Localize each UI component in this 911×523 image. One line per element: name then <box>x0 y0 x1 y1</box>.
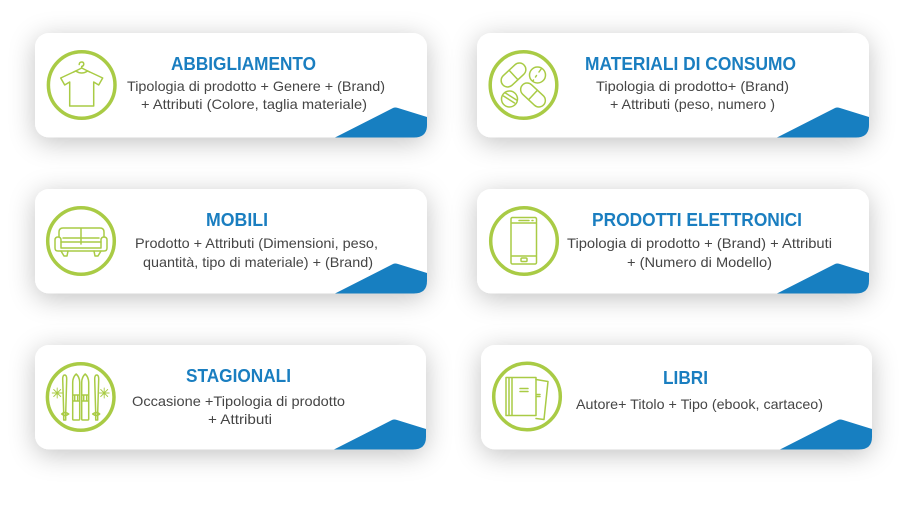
corner accent: libri <box>780 420 872 450</box>
heading: mobili: MOBILI <box>206 209 268 230</box>
heading: prodotti elettronici: PRODOTTI ELETTRONICI <box>592 209 802 230</box>
icon: pills <box>490 52 557 118</box>
corner accent: abbigliamento <box>335 108 427 138</box>
text: mobili line 1: Prodotto + Attributi (Dimensioni, peso, <box>135 235 378 251</box>
panel: mobili <box>35 189 427 294</box>
panel: stagionali <box>35 345 426 450</box>
heading: stagionali: STAGIONALI <box>186 365 291 386</box>
text: libri description: Autore+ Titolo + Tipo (ebook, cartaceo) <box>576 396 823 412</box>
panel: prodotti elettronici <box>477 189 869 294</box>
text: materiali line 2: + Attributi (peso, numero ) <box>610 96 775 112</box>
heading: abbigliamento: ABBIGLIAMENTO <box>171 53 316 74</box>
text: stagionali line 2: + Attributi <box>208 411 272 427</box>
heading: libri: LIBRI <box>663 367 708 388</box>
panel: libri <box>481 345 872 450</box>
text: abbigliamento line 2: + Attributi (Colore, taglia materiale) <box>141 96 367 112</box>
text: abbigliamento line 1: Tipologia di prodotto + Genere + (Brand) <box>127 78 385 94</box>
heading: materiali di consumo: MATERIALI DI CONSUMO <box>585 53 796 74</box>
text: mobili line 2: quantità, tipo di materiale) + (Brand) <box>143 254 373 270</box>
text: materiali line 1: Tipologia di prodotto+ (Brand) <box>596 78 789 94</box>
icon: books <box>494 363 560 430</box>
panel: abbigliamento <box>35 33 427 138</box>
corner accent: materiali <box>777 108 869 138</box>
panel: materiali di consumo <box>477 33 869 138</box>
icon: smartphone <box>491 208 557 274</box>
icon: sofa <box>48 208 114 274</box>
icon: skis and poles <box>47 364 114 430</box>
text: prodotti line 1: Tipologia di prodotto + (Brand) + Attributi <box>567 235 832 251</box>
corner accent: stagionali <box>334 420 426 450</box>
icon: t-shirt <box>48 52 115 118</box>
corner accent: mobili <box>335 264 427 294</box>
text: stagionali line 1: Occasione +Tipologia di prodotto <box>132 393 345 409</box>
text: prodotti line 2: + (Numero di Modello) <box>627 254 772 270</box>
corner accent: prodotti <box>777 264 869 294</box>
